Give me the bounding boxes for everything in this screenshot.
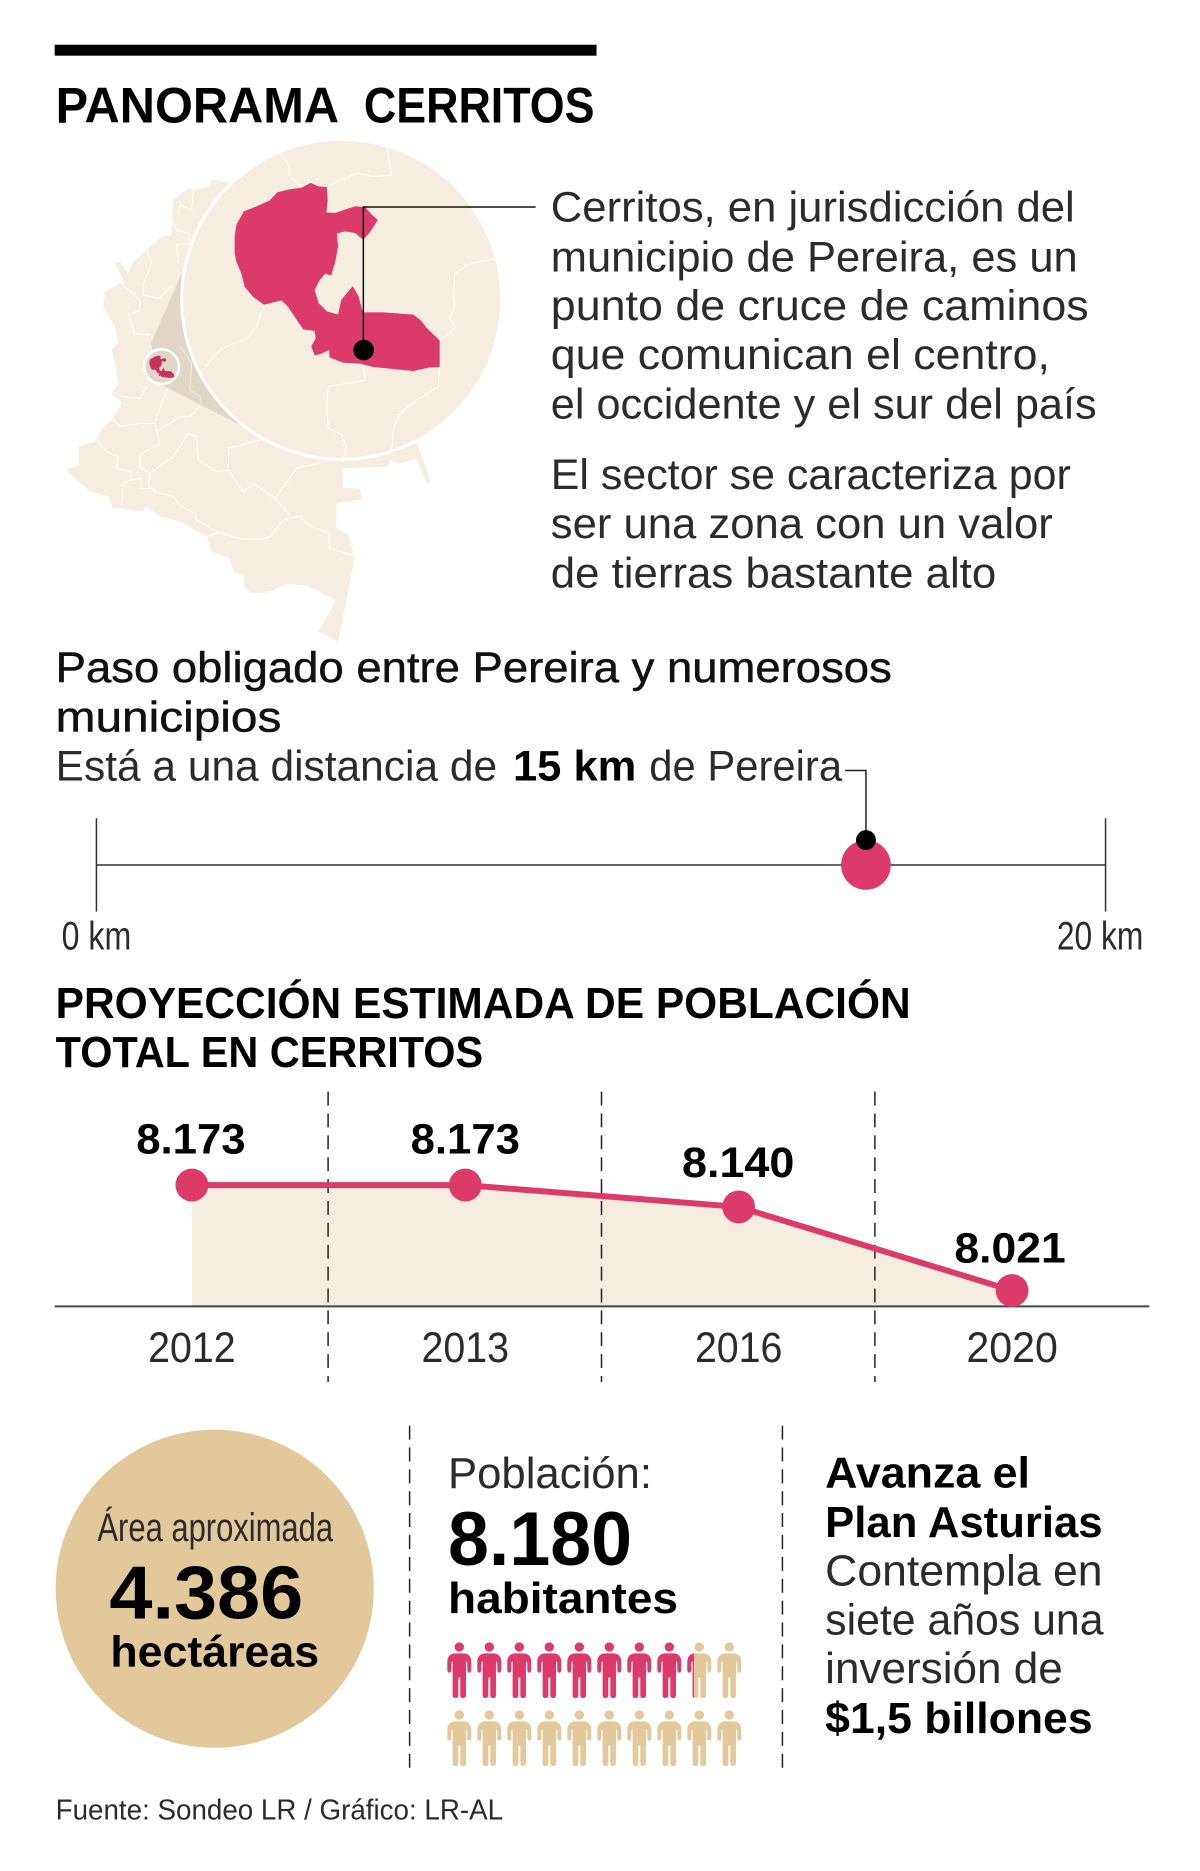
source: Fuente: Sondeo LR / Gráfico: LR-AL	[56, 1794, 503, 1826]
intro text: que comunican el centro,	[551, 331, 1050, 379]
distance heading	[56, 644, 892, 790]
distance heading: Paso obligado entre Pereira y numerosos	[56, 644, 892, 692]
line chart	[55, 1092, 1149, 1382]
Cerritos area	[235, 183, 439, 371]
leader to marker	[845, 771, 866, 840]
plan Asturias block	[825, 1448, 1104, 1743]
map: Colombia with Cerritos locator	[66, 139, 536, 642]
population heading: TOTAL EN CERRITOS	[56, 1028, 483, 1077]
country silhouette	[66, 180, 431, 642]
area circle: 4.386	[109, 1552, 303, 1636]
Cerritos marker	[841, 840, 891, 890]
values: 8.021	[954, 1225, 1066, 1273]
years: 2012	[148, 1324, 236, 1372]
years	[148, 1324, 1058, 1372]
population block: 8.180	[448, 1497, 632, 1582]
title: CERRITOS	[364, 77, 595, 133]
intro text: Cerritos, en jurisdicción del	[551, 184, 1075, 232]
distance scale: 20 km	[1057, 914, 1143, 958]
population block: habitantes	[448, 1574, 678, 1623]
distance scale	[62, 771, 1143, 958]
distance heading: de Pereira	[649, 742, 842, 790]
values: 8.140	[682, 1139, 794, 1187]
population heading: PROYECCIÓN ESTIMADA DE POBLACIÓN	[56, 978, 911, 1028]
plan Asturias block: siete años una	[825, 1595, 1104, 1644]
intro text: el occidente y el sur del país	[551, 381, 1097, 429]
department borders	[97, 190, 355, 556]
years: 2016	[695, 1324, 782, 1372]
line	[192, 1185, 1012, 1290]
intro text	[551, 184, 1097, 598]
title	[56, 77, 595, 133]
distance scale: 0 km	[62, 914, 131, 958]
plan Asturias block: Contempla en	[825, 1547, 1103, 1596]
area	[192, 1185, 1012, 1306]
values: 8.173	[411, 1115, 520, 1163]
title: PANORAMA	[56, 77, 339, 133]
magnified circle	[182, 139, 502, 459]
values: 8.173	[136, 1115, 246, 1163]
area circle: Área aproximada	[97, 1505, 334, 1550]
plan Asturias block: $1,5 billones	[825, 1694, 1093, 1743]
population block: Población:	[448, 1449, 652, 1498]
population heading	[56, 978, 911, 1077]
municipal borders	[205, 147, 497, 460]
years: 2013	[422, 1324, 509, 1372]
intro text: municipio de Pereira, es un	[551, 233, 1078, 281]
pictogram	[447, 1642, 741, 1766]
top rule	[55, 45, 597, 56]
dashed separators	[410, 1426, 782, 1772]
area circle	[56, 1430, 374, 1748]
distance heading: 15 km	[513, 742, 636, 790]
values	[136, 1115, 1066, 1273]
zoom cone	[151, 268, 253, 432]
distance heading: municipios	[56, 694, 281, 742]
plan Asturias block: Plan Asturias	[825, 1498, 1103, 1547]
area circle: hectáreas	[110, 1627, 319, 1676]
plan Asturias block: Avanza el	[825, 1448, 1030, 1497]
population block	[447, 1449, 741, 1766]
leader line and marker	[353, 207, 536, 360]
small locator circle	[144, 349, 179, 384]
plan Asturias block: inversión de	[825, 1644, 1063, 1693]
intro text: ser una zona con un valor	[551, 500, 1053, 548]
years: 2020	[966, 1324, 1058, 1372]
distance heading: Está a una distancia de	[56, 742, 497, 790]
intro text: punto de cruce de caminos	[551, 282, 1089, 330]
intro text: de tierras bastante alto	[551, 550, 996, 598]
intro text: El sector se caracteriza por	[551, 451, 1071, 499]
